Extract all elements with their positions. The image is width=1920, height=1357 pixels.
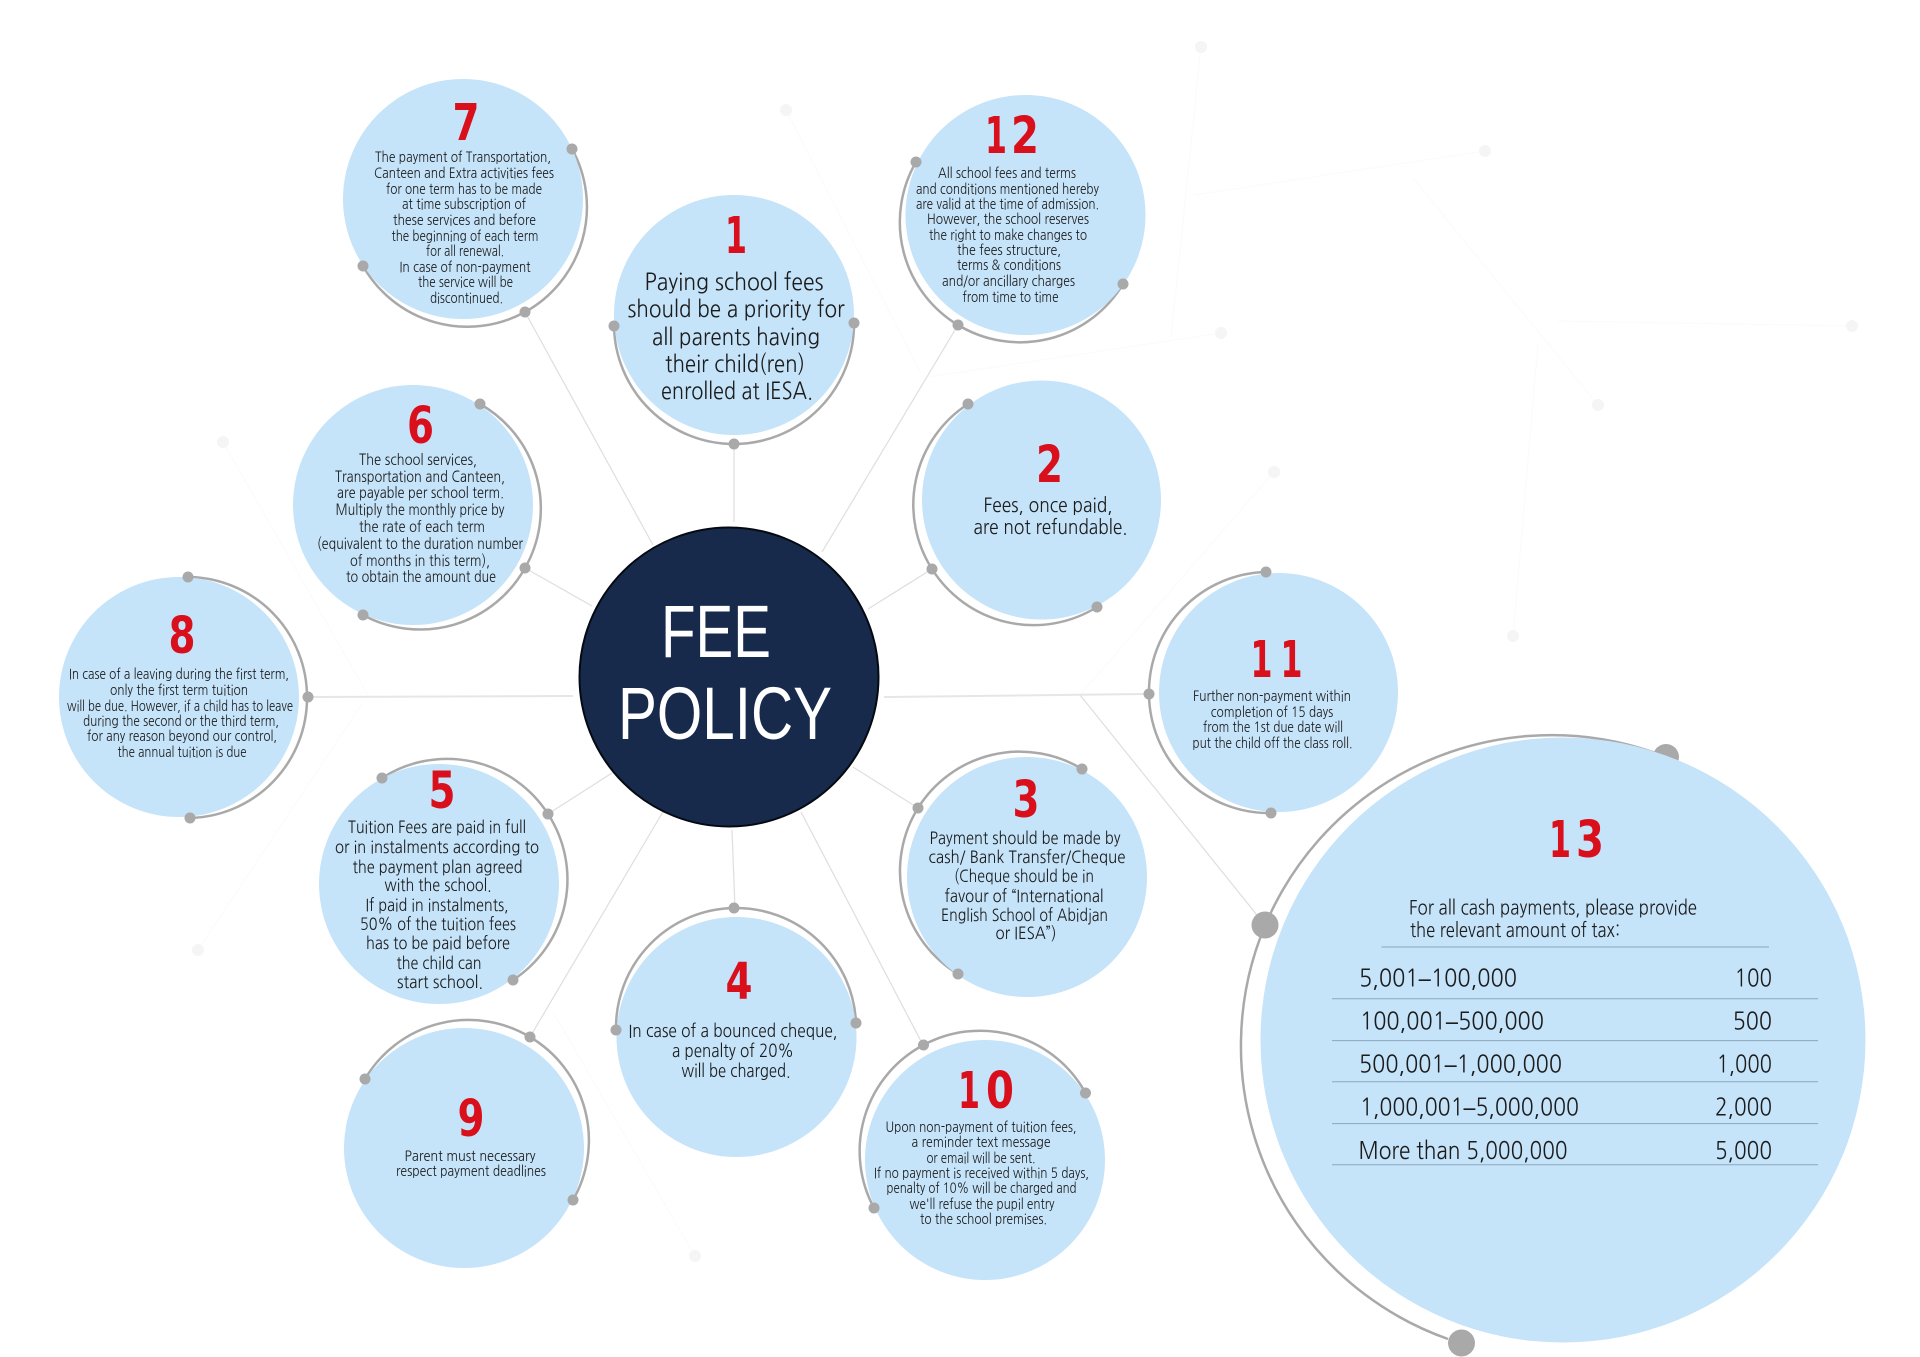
text 9: Parent must necessary — [404, 1150, 536, 1164]
number 4: 4 — [726, 953, 752, 1012]
text 7: discontinued. — [430, 291, 503, 306]
panel: policy 2 — [913, 380, 1161, 625]
text 7: for one term has to be made — [386, 182, 542, 197]
table rules — [1332, 947, 1818, 1165]
text 8: will be due. However, if a child has to leave — [67, 699, 293, 714]
text 7: for all renewal. — [426, 244, 504, 259]
text 12: from time to time — [962, 290, 1059, 305]
text 8: during the second or the third term, — [83, 714, 279, 729]
tax amounts: 1,000 — [1717, 1053, 1772, 1077]
text 10: a reminder text message — [912, 1135, 1051, 1150]
text 3: cash/ Bank Transfer/Cheque — [928, 849, 1126, 866]
text 6: of months in this term), — [350, 554, 490, 569]
text 3: English School of Abidjan — [941, 907, 1108, 926]
tax amounts: 2,000 — [1715, 1095, 1772, 1119]
text 6: are payable per school term. — [337, 486, 504, 501]
text 10: If no payment is received within 5 days, — [874, 1166, 1089, 1181]
text 10: or email will be sent. — [926, 1151, 1036, 1166]
text 6 — [317, 453, 523, 585]
text 11: from the 1st due date will — [1203, 720, 1343, 735]
text 10: penalty of 10% will be charged and — [886, 1181, 1076, 1196]
panel: policy 10 — [860, 1031, 1105, 1280]
number 6: 6 — [407, 397, 434, 456]
number 8: 8 — [168, 607, 196, 666]
text 10: to the school premises. — [920, 1212, 1047, 1227]
panel: policy 4 — [610, 902, 862, 1157]
text 5 — [335, 819, 539, 991]
text 6: Multiply the monthly price by — [336, 503, 505, 518]
text 4 — [628, 1022, 838, 1080]
panel: hub FEE POLICY — [580, 528, 878, 826]
text 8 — [67, 667, 293, 760]
text 5: 50% of the tuition fees — [360, 916, 516, 933]
hub title: POLICY — [618, 672, 832, 755]
text 8: the annual tuition is due — [118, 745, 247, 760]
text 7: The payment of Transportation, — [375, 150, 551, 165]
hub title — [618, 590, 832, 755]
text 5: Tuition Fees are paid in full — [348, 819, 526, 836]
text 1: Paying school fees — [644, 271, 824, 294]
text 6: The school services, — [359, 453, 477, 468]
text 12: are valid at the time of admission. — [916, 197, 1099, 212]
faint background network — [192, 41, 1858, 1262]
text 12: the right to make changes to — [929, 228, 1087, 243]
text 10 — [874, 1120, 1089, 1227]
number 10: 1 — [958, 1062, 980, 1121]
text 12: terms & conditions — [957, 258, 1061, 273]
text 9 — [396, 1150, 546, 1179]
number 10: 0 — [986, 1062, 1014, 1121]
text 4: a penalty of 20% — [672, 1042, 794, 1060]
text 6: (equivalent to the duration number — [317, 537, 523, 552]
number 13 — [1549, 811, 1604, 870]
text 3: or IESA”) — [996, 924, 1056, 942]
text 1 — [628, 271, 845, 403]
tax ranges: 500,001–1,000,000 — [1359, 1052, 1562, 1079]
text 6: Transportation and Canteen, — [335, 470, 505, 485]
text 3 — [928, 830, 1126, 942]
panel: policy 9 — [344, 1020, 589, 1268]
panel: policy 6 — [293, 385, 541, 630]
number 1: 1 — [725, 207, 747, 266]
text 7: In case of non-payment — [400, 260, 531, 275]
text 12: All school fees and terms — [938, 166, 1076, 181]
text 12: the fees structure, — [957, 243, 1061, 258]
tax ranges: 100,001–500,000 — [1360, 1009, 1544, 1036]
text 4: In case of a bounced cheque, — [628, 1022, 838, 1040]
text 12: However, the school reserves — [927, 212, 1089, 227]
text 1: should be a priority for — [628, 298, 845, 321]
number 11 — [1250, 631, 1302, 690]
text 1: enrolled at IESA. — [661, 380, 813, 403]
number 5: 5 — [428, 762, 456, 821]
tax ranges: 1,000,001–5,000,000 — [1360, 1094, 1579, 1121]
text 3: favour of “International — [944, 887, 1104, 905]
panel: policy 8 — [59, 572, 314, 824]
text 8: for any reason beyond our control, — [87, 729, 277, 744]
text 6: the rate of each term — [359, 520, 485, 535]
panel: policy 7 — [343, 79, 587, 327]
text 12 — [916, 166, 1099, 305]
text 7: the beginning of each term — [392, 229, 538, 244]
text 5: the payment plan agreed — [352, 859, 522, 876]
text 10: Upon non-payment of tuition fees, — [886, 1120, 1076, 1135]
text 3: (Cheque should be in — [954, 867, 1094, 885]
tax amounts: 100 — [1734, 966, 1772, 990]
number 13: 3 — [1576, 811, 1604, 870]
panel: policy 1 — [608, 195, 860, 450]
intro text: For all cash payments, please provide — [1409, 898, 1697, 918]
text 9: respect payment deadlines — [396, 1164, 546, 1179]
number 7: 7 — [452, 94, 480, 153]
panel: policy 3 — [900, 752, 1147, 997]
hub title: FEE — [661, 590, 771, 673]
text 5: has to be paid before — [366, 935, 510, 952]
panel: policy 11 — [1144, 566, 1398, 818]
text 2: are not refundable. — [974, 517, 1128, 537]
text 2: Fees, once paid, — [984, 495, 1112, 515]
text 8: only the first term tuition — [110, 683, 248, 698]
text 6: to obtain the amount due — [346, 570, 496, 585]
text 5: with the school. — [384, 877, 492, 894]
number 11: 1 — [1280, 631, 1302, 690]
tax ranges — [1358, 966, 1579, 1163]
text 10: we'll refuse the pupil entry — [910, 1197, 1055, 1212]
tax amounts: 500 — [1733, 1010, 1772, 1034]
tax amounts: 5,000 — [1715, 1139, 1772, 1163]
intro text: the relevant amount of tax: — [1410, 920, 1620, 940]
text 7: these services and before — [393, 213, 536, 228]
text 7: Canteen and Extra activities fees — [374, 166, 554, 181]
panel: policy 12 — [900, 95, 1146, 342]
text 11: Further non-payment within — [1193, 689, 1351, 704]
panel: policy 5 — [319, 759, 567, 1004]
number 12: 1 — [985, 107, 1007, 166]
text 7 — [374, 150, 554, 306]
number 10 — [958, 1062, 1014, 1121]
text 7: at time subscription of — [402, 197, 526, 212]
text 3: Payment should be made by — [930, 830, 1121, 847]
text 12: and/or ancillary charges — [942, 274, 1075, 289]
number 3: 3 — [1012, 771, 1040, 830]
text 1: all parents having — [652, 326, 820, 349]
tax amounts — [1715, 966, 1772, 1163]
text 12: and conditions mentioned hereby — [916, 182, 1099, 197]
text 5: the child can — [396, 955, 482, 972]
text 2 — [974, 495, 1128, 537]
text 1: their child(ren) — [665, 353, 805, 376]
text 5: start school. — [397, 974, 483, 991]
text 8: In case of a leaving during the first term, — [69, 667, 289, 682]
text 5: or in instalments according to — [335, 839, 539, 856]
tax ranges: 5,001–100,000 — [1359, 966, 1517, 992]
number 13: 1 — [1549, 811, 1571, 870]
tax ranges: More than 5,000,000 — [1358, 1139, 1568, 1163]
panel: policy 13 tax table — [1241, 735, 1866, 1356]
number 12: 2 — [1011, 107, 1039, 166]
intro text — [1409, 898, 1697, 940]
text 11: put the child off the class roll. — [1192, 736, 1352, 751]
text 5: If paid in instalments, — [366, 897, 508, 914]
text 11: completion of 15 days — [1211, 705, 1333, 720]
text 7: the service will be — [418, 275, 513, 290]
text 11 — [1192, 689, 1352, 751]
connector lines from hub to circles — [308, 312, 1265, 1045]
number 9: 9 — [458, 1090, 484, 1149]
number 2: 2 — [1036, 436, 1063, 495]
number 12 — [985, 107, 1039, 166]
number 11: 1 — [1250, 631, 1272, 690]
text 4: will be charged. — [682, 1062, 790, 1080]
